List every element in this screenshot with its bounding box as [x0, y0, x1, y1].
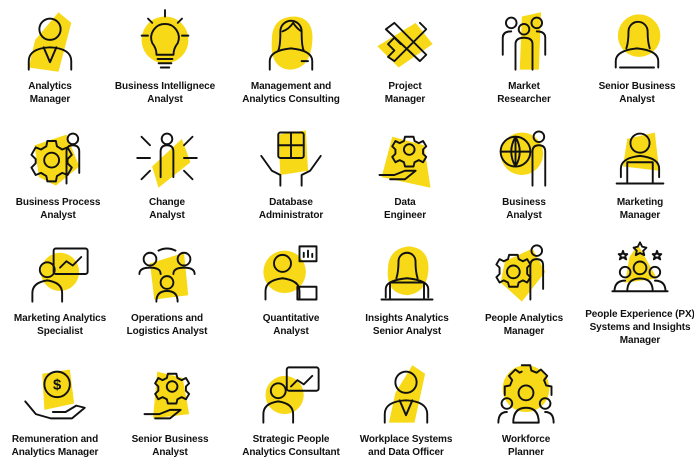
cell: Senior Business Analyst — [599, 14, 676, 105]
cell: Operations and Logistics Analyst: Logistics Analyst — [127, 326, 207, 337]
cell: Business Intelligence Analyst: Analyst — [147, 94, 183, 105]
cell: Senior Business Analyst 2: Analyst — [152, 447, 188, 458]
cell: Remuneration and Analytics Manager — [12, 370, 98, 458]
cell: Marketing Manager — [616, 132, 664, 221]
cell: Business Process Analyst — [16, 132, 100, 221]
cell: Business Process Analyst: Analyst — [40, 210, 76, 221]
cell: Senior Business Analyst 2 — [132, 372, 208, 458]
cell: Remuneration and Analytics Manager: $ — [53, 378, 62, 394]
cell: Business Analyst: Analyst — [506, 210, 542, 221]
cell: Marketing Manager: Manager — [620, 210, 660, 221]
cell: Market Researcher: Researcher — [497, 94, 551, 105]
cell: Senior Business Analyst: Senior Business — [599, 81, 675, 92]
cell: Business Process Analyst: Business Process — [16, 197, 100, 208]
cell: Senior Business Analyst: Analyst — [619, 94, 655, 105]
cell: Business Intelligence Analyst: Business Intellignece — [115, 81, 215, 92]
cell: Senior Business Analyst 2: Senior Business — [132, 434, 208, 445]
cell: Marketing Analytics Specialist: Marketing Analytics — [14, 313, 106, 324]
cell: Remuneration and Analytics Manager: Analytics Manager — [12, 447, 98, 458]
cell: Quantitative Analyst: Analyst — [273, 326, 309, 337]
cell: Change Analyst: Analyst — [149, 210, 185, 221]
cell: Market Researcher — [497, 12, 551, 105]
cell: Project Manager: Manager — [385, 94, 425, 105]
cell: People Experience (PX) Systems and Insights Manager: People Experience (PX) — [585, 309, 694, 320]
cell: Database Administrator: Administrator — [259, 210, 323, 221]
cell: Quantitative Analyst — [263, 245, 320, 337]
cell: People Experience (PX) Systems and Insights Manager: Manager — [620, 335, 660, 346]
cell: Workforce Planner: Workforce — [502, 434, 550, 445]
cell: Strategic People Analytics Consultant: Analytics Consultant — [242, 447, 340, 458]
cell: Business Analyst — [500, 130, 546, 221]
cell: Management and Analytics Consulting: Analytics Consulting — [242, 94, 340, 105]
cell: Project Manager: Project — [388, 81, 422, 92]
cell: Strategic People Analytics Consultant: Strategic People — [253, 434, 329, 445]
cell: People Analytics Manager — [485, 244, 563, 337]
cell: Operations and Logistics Analyst — [127, 248, 208, 337]
cell: Management and Analytics Consulting — [242, 16, 340, 105]
cell: Business Intelligence Analyst — [115, 9, 215, 105]
cell: People Analytics Manager: Manager — [504, 326, 544, 337]
cell: Strategic People Analytics Consultant — [242, 366, 340, 458]
cell: Management and Analytics Consulting: Management and — [251, 81, 331, 92]
cell: Marketing Manager: Marketing — [617, 197, 663, 208]
cell: Business Analyst: Business — [502, 197, 546, 208]
cell: Workforce Planner — [497, 364, 555, 458]
cell: Data Engineer: Data — [394, 197, 416, 208]
cell: People Experience (PX) Systems and Insights Manager — [585, 241, 694, 346]
cell: People Analytics Manager: People Analytics — [485, 313, 563, 324]
cell: Remuneration and Analytics Manager: Remuneration and — [12, 434, 98, 445]
cell: Quantitative Analyst: Quantitative — [263, 313, 319, 324]
cell: People Experience (PX) Systems and Insights Manager: Systems and Insights — [590, 322, 690, 333]
cell: Marketing Analytics Specialist — [14, 248, 106, 337]
cell: Database Administrator: Database — [269, 197, 313, 208]
cell: Workplace Systems and Data Officer: Workplace Systems — [360, 434, 452, 445]
cell: Workforce Planner: Planner — [508, 447, 544, 458]
cell: Marketing Analytics Specialist: Specialist — [37, 326, 83, 337]
cell: Insights Analytics Senior Analyst: Senior Analyst — [373, 326, 441, 337]
cell: Change Analyst: Change — [149, 197, 185, 208]
cell: Insights Analytics Senior Analyst — [365, 246, 449, 337]
cell: Operations and Logistics Analyst: Operations and — [131, 313, 203, 324]
cell: Database Administrator — [259, 130, 324, 221]
cell: Analytics Manager — [28, 12, 72, 105]
cell: Insights Analytics Senior Analyst: Insights Analytics — [365, 313, 449, 324]
cell: Project Manager — [377, 22, 433, 105]
cell: Workplace Systems and Data Officer — [360, 365, 452, 458]
cell: Workplace Systems and Data Officer: and Data Officer — [368, 447, 444, 458]
cell: Data Engineer: Engineer — [384, 210, 426, 221]
cell: Data Engineer — [378, 136, 430, 221]
cell: Analytics Manager: Manager — [30, 94, 70, 105]
cell: Analytics Manager: Analytics — [28, 81, 72, 92]
cell: Change Analyst — [136, 132, 198, 221]
cell: Market Researcher: Market — [508, 81, 540, 92]
